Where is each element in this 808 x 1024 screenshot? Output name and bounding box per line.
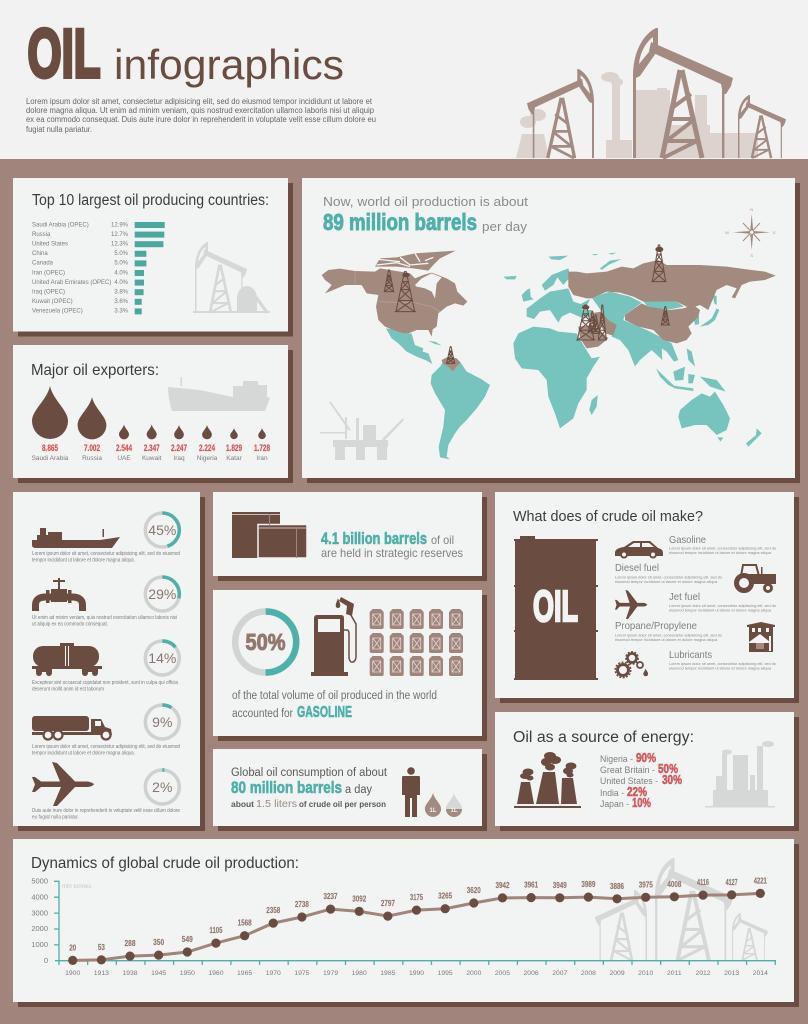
country names: Venezuela (OPEC) [32, 309, 83, 315]
gasoline text: of the total volume of oil produced in the world [232, 690, 437, 702]
export values: 7.002 [84, 443, 100, 453]
heading: top 10: Top 10 largest oil producing countries: [32, 192, 269, 209]
ring values: 9% [152, 714, 172, 730]
transport descriptions: Lorem ipsum dolor sit amet, consectetur adipisicing elit, sed do eiusmod [32, 744, 180, 750]
donut value: 50% [246, 629, 286, 655]
export countries: Russia [82, 455, 102, 462]
intro text: ex ea commodo consequat. Duis aute irure dolor in reprehenderit in voluptate velit esse cillum dolore eu [26, 114, 376, 124]
data values: 20 [69, 943, 77, 952]
icon: rail tank car [32, 643, 102, 676]
icon: compass: E [773, 230, 776, 235]
x axis: 1995 [438, 970, 453, 977]
export countries: Iraq [173, 455, 185, 462]
heading: exporters: Major oil exporters: [31, 362, 159, 379]
production line [73, 893, 760, 960]
country names: Iran (OPEC) [32, 270, 65, 276]
x axis: 1960 [208, 970, 224, 977]
percentages: 3.6% [114, 299, 129, 305]
data values: 288 [124, 939, 136, 948]
icon: house [747, 622, 775, 652]
map: teal continents [386, 253, 762, 459]
data values: 3092 [352, 894, 367, 903]
energy list: United States - [600, 776, 658, 787]
gasoline text: GASOLINE [297, 704, 352, 721]
data values: 4116 [697, 878, 709, 887]
reserves text: 4.1 billion barrels [321, 530, 427, 548]
y axis: 5000 [31, 876, 48, 886]
map heading [323, 194, 528, 235]
ring values: 29% [148, 586, 176, 602]
item: diesel: eiusmod tempor incididunt ut labore et dolore magna aliqua [615, 579, 718, 584]
data values: 3265 [438, 892, 453, 901]
x axis: 1970 [266, 970, 281, 977]
y axis [31, 876, 91, 965]
export countries: Katar [226, 455, 243, 462]
x axis: 2006 [524, 970, 539, 977]
x axis: 2000 [466, 970, 482, 977]
energy list: Great Britain - [600, 765, 655, 776]
export countries [32, 455, 268, 462]
data values: 2797 [381, 899, 395, 908]
data values: 3886 [610, 882, 624, 891]
icon: compass: S [750, 253, 753, 258]
heading: dynamics: Dynamics of global crude oil production: [31, 855, 299, 872]
bar chart [135, 222, 165, 314]
x axis: 1965 [237, 970, 252, 977]
country names [32, 222, 111, 315]
data values: 2738 [295, 900, 309, 909]
icon: one litre drops [425, 793, 462, 817]
item: gasoline [669, 534, 777, 555]
consumption text: of crude oil per person [299, 800, 386, 809]
item: gasoline: eiusmod tempor incididunt ut labore et dolore magna aliqua [669, 550, 772, 555]
item: jet fuel [669, 591, 777, 612]
country names: Iraq (OPEC) [32, 290, 65, 296]
energy percentages: 30% [662, 773, 682, 787]
header pumpjack left [527, 69, 594, 158]
icon: fuel pump [311, 597, 356, 676]
intro text [26, 96, 376, 134]
energy percentages: 90% [636, 751, 656, 765]
export values: 1.829 [226, 443, 242, 453]
percentages: 3.3% [114, 309, 129, 315]
percentages: 12.7% [111, 232, 129, 238]
header factory silhouette [516, 72, 758, 158]
icon: one litre drops: 1L [429, 808, 437, 814]
y axis: 3000 [31, 908, 48, 917]
x axis: 2009 [609, 970, 625, 977]
item: gasoline: Lorem ipsum dolor sit amet, consectetur adipisicing elit, sed do [669, 546, 777, 550]
icon: pipeline [36, 578, 82, 611]
panel: strategic reserves [213, 492, 487, 581]
item: gasoline: Gasoline [669, 534, 706, 546]
energy list: India - [600, 788, 624, 799]
header background [0, 0, 808, 159]
icon: one litre drops: 1L [450, 808, 458, 814]
y axis: 1000 [31, 940, 48, 949]
intro text: fugiat nulla pariatur. [26, 124, 92, 134]
x axis: 2012 [695, 970, 711, 977]
item: propane: eiusmod tempor incididunt ut labore et dolore magna aliqua [615, 637, 718, 642]
transport descriptions: Duis aute irure dolor in reprehenderit in voluptate velit esse cillum dolore [32, 808, 180, 814]
transport descriptions: Excepteur sint occaecat cupidatat non proident, sunt in culpa qui officia [32, 680, 179, 686]
export countries: Saudi Arabia [32, 455, 69, 462]
data values: 4127 [726, 878, 738, 887]
title: infographics [114, 41, 344, 88]
country names: China [32, 251, 48, 257]
header pumpjack center [633, 28, 733, 158]
icon: tank truck [32, 716, 112, 740]
x axis: 2013 [724, 970, 739, 977]
line chart [31, 876, 776, 977]
percentages: 12.3% [111, 242, 129, 248]
data values: 3237 [324, 892, 338, 901]
percentages [111, 222, 129, 315]
y axis: 0 [44, 956, 48, 965]
item: jet fuel: Jet fuel [669, 591, 700, 603]
map: brown producer countries [322, 251, 776, 372]
map: oil derricks [384, 245, 670, 363]
x axis: 2010 [638, 970, 653, 977]
energy percentages: 22% [627, 785, 647, 799]
icon: grey refinery [705, 741, 775, 808]
world map [322, 245, 776, 459]
energy percentages: 50% [658, 762, 678, 776]
y axis: 4000 [31, 892, 48, 901]
panel: transport shares [13, 492, 205, 831]
export values: 2.347 [144, 443, 160, 453]
energy list: Nigeria - [600, 754, 633, 765]
y axis: mln tonnes [62, 884, 91, 890]
consumption text [231, 767, 388, 810]
x axis: 2007 [552, 970, 568, 977]
x axis: 1900 [65, 970, 80, 977]
gasoline text [232, 690, 437, 721]
icons: fuel canisters [370, 609, 463, 676]
item: lubricants: Lorem ipsum dolor sit amet, consectetur adipisicing elit, sed do [669, 661, 777, 666]
energy list: Japan - [600, 799, 629, 810]
item: propane: Lorem ipsum dolor sit amet, consectetur adipisicing elit, sed do [615, 632, 723, 638]
panel: consumption [213, 749, 487, 831]
x axis: 1985 [380, 970, 396, 977]
ring values: 45% [148, 522, 176, 538]
map heading: per day [482, 219, 528, 234]
icon: compass: N [750, 207, 753, 212]
map heading: 89 million barrels [323, 209, 477, 235]
export values: 2.247 [171, 443, 187, 453]
x axis: 2011 [667, 970, 682, 977]
consumption text: 80 million barrels [231, 779, 342, 797]
country names: Kuwait (OPEC) [32, 299, 73, 305]
ring charts [145, 513, 179, 804]
consumption text: 1.5 liters [256, 799, 297, 810]
x axis: 1945 [151, 970, 166, 977]
x axis [55, 961, 776, 977]
item: jet fuel: eiusmod tempor incididunt ut labore et dolore magna aliqua [669, 608, 772, 612]
x axis: 1975 [294, 970, 310, 977]
icon: airplane [32, 762, 94, 806]
transport descriptions [32, 551, 180, 820]
percentages: 5.0% [114, 261, 129, 267]
grey pumpjacks [595, 858, 768, 960]
consumption text: a day [345, 784, 372, 796]
intro text: Lorem ipsum dolor sit amet, consectetur adipisicing elit, sed do eiusmod tempor incididunt ut labore et [26, 96, 373, 106]
panel: major exporters [13, 345, 293, 483]
data values: 2358 [266, 906, 281, 915]
country names: Russia [32, 232, 51, 238]
icon: grey tanker [168, 377, 270, 411]
icon: compass [725, 207, 776, 258]
item: lubricants: eiusmod tempor incididunt ut labore et dolore magna aliqua [669, 666, 772, 670]
data values: 4008 [667, 880, 682, 889]
transport descriptions: Ut enim ad minim veniam, quis nostrud exercitation ullamco laboris nisi [32, 615, 177, 621]
export values: 2.544 [116, 443, 132, 453]
percentages: 4.0% [114, 270, 129, 276]
heading: energy: Oil as a source of energy: [513, 729, 694, 746]
icon: oil barrel: OIL [533, 582, 578, 631]
export countries: Nigeria [197, 455, 218, 462]
transport descriptions: eu fugiat nulla pariatur. [32, 814, 79, 820]
reserves text: are held in strategic reserves [321, 546, 463, 560]
export countries: Kuwait [142, 455, 162, 462]
data points [68, 889, 765, 965]
panel: what crude oil makes [495, 492, 799, 703]
export countries: UAE [117, 455, 131, 462]
map heading: Now, world oil production is about [323, 194, 528, 209]
item: jet fuel: Lorem ipsum dolor sit amet, consectetur adipisicing elit, sed do [669, 603, 777, 608]
energy percentages: 10% [632, 796, 651, 810]
oil drops [32, 386, 266, 439]
title [28, 15, 344, 92]
percentages: 4.0% [114, 280, 129, 286]
country names: Saudi Arabia (OPEC) [32, 222, 89, 228]
data values [69, 876, 767, 952]
icon: cooling towers [514, 752, 581, 808]
data values: 3961 [524, 881, 539, 890]
heading: crude products: What does of crude oil make? [513, 509, 703, 525]
icon: offshore rig [320, 402, 404, 460]
panel: energy source [495, 712, 799, 831]
x axis: 1980 [352, 970, 367, 977]
transport descriptions: deserunt mollit anim id est laborum [32, 686, 104, 692]
data values: 3620 [467, 886, 481, 895]
icon: person [402, 767, 420, 817]
data values: 549 [182, 935, 193, 944]
item: lubricants: Lubricants [669, 649, 712, 661]
map: arctic channels and borders [355, 253, 440, 312]
header pumpjack right [738, 95, 786, 158]
gasoline text: accounted for [232, 708, 293, 720]
data values: 3942 [495, 881, 510, 890]
x axis: 2005 [495, 970, 510, 977]
ring values: 14% [148, 650, 176, 666]
ring values: 2% [152, 779, 172, 795]
x axis: 2014 [753, 970, 768, 977]
data values: 350 [153, 938, 165, 947]
item: diesel [615, 562, 723, 584]
x axis: 1979 [323, 970, 338, 977]
panel: world map [302, 178, 800, 483]
country names: Canada [32, 261, 54, 267]
panel: gasoline share [213, 590, 487, 741]
data values: 3975 [639, 880, 653, 889]
item: diesel: Lorem ipsum dolor sit amet, consectetur adipisicing elit, sed do [615, 574, 723, 580]
transport descriptions: tempor incididunt ut labore et dolore magna aliqua. [32, 750, 135, 756]
icon: compass: W [725, 230, 729, 235]
data values: 53 [98, 943, 105, 952]
export values [42, 443, 270, 453]
reserves text [321, 530, 463, 560]
icon: gears [615, 652, 648, 678]
export countries: Iran [256, 455, 268, 462]
consumption text: about [231, 800, 254, 809]
donut chart [235, 612, 296, 672]
energy percentages [627, 751, 682, 810]
x axis: 1938 [122, 970, 138, 977]
data values: 4221 [754, 876, 767, 885]
icon: tanker ship [32, 528, 120, 548]
icon: car [615, 541, 663, 558]
x axis: 2008 [581, 970, 596, 977]
reserves text: of oil [431, 533, 454, 547]
icon: oil barrel [514, 536, 598, 680]
x axis: 1990 [409, 970, 424, 977]
x axis: 1950 [180, 970, 195, 977]
export values: 2.224 [199, 443, 215, 453]
icon: jet plane [615, 590, 647, 619]
title: OIL [28, 15, 100, 92]
percentages: 5.0% [114, 251, 129, 257]
item: lubricants [669, 649, 777, 670]
transport descriptions: ut aliquip ex ea commodo consequat. [32, 622, 108, 628]
data values: 3175 [410, 893, 423, 902]
energy list [600, 754, 658, 810]
x axis: 1913 [94, 970, 109, 977]
data values: 3989 [581, 880, 596, 889]
data values: 1105 [209, 926, 223, 935]
percentages: 3.8% [114, 290, 129, 296]
ring values [148, 522, 176, 795]
country names: United States [32, 242, 68, 248]
export values: 1.728 [254, 443, 270, 453]
percentages: 12.9% [111, 222, 129, 228]
transport descriptions: tempor incididunt ut labore et dolore magna aliqua. [32, 558, 135, 564]
export values: 8.865 [42, 443, 58, 453]
intro text: dolore magna aliqua. Ut enim ad minim veniam, quis nostrud exercitation ullamco laboris nisi ut aliquip [26, 105, 374, 115]
item: propane [615, 620, 723, 642]
y axis: 2000 [31, 924, 48, 933]
consumption text: Global oil consumption of about [231, 767, 388, 779]
panel: top 10 producers [13, 178, 293, 336]
data values: 1568 [238, 919, 252, 928]
item: propane: Propane/Propylene [615, 620, 697, 632]
data values: 3949 [553, 881, 567, 890]
map: derrick smoke [402, 247, 663, 310]
item: diesel: Diesel fuel [615, 562, 659, 574]
country names: United Arab Emirates (OPEC) [32, 280, 111, 286]
icon: grey pumpjack [193, 242, 270, 313]
transport descriptions: Lorem ipsum dolor sit amet, consectetur adipisicing elit, sed do eiusmod [32, 551, 180, 557]
icon: tractor [736, 565, 776, 592]
icon: storage tanks [232, 512, 307, 558]
panel: production chart [13, 839, 799, 1007]
